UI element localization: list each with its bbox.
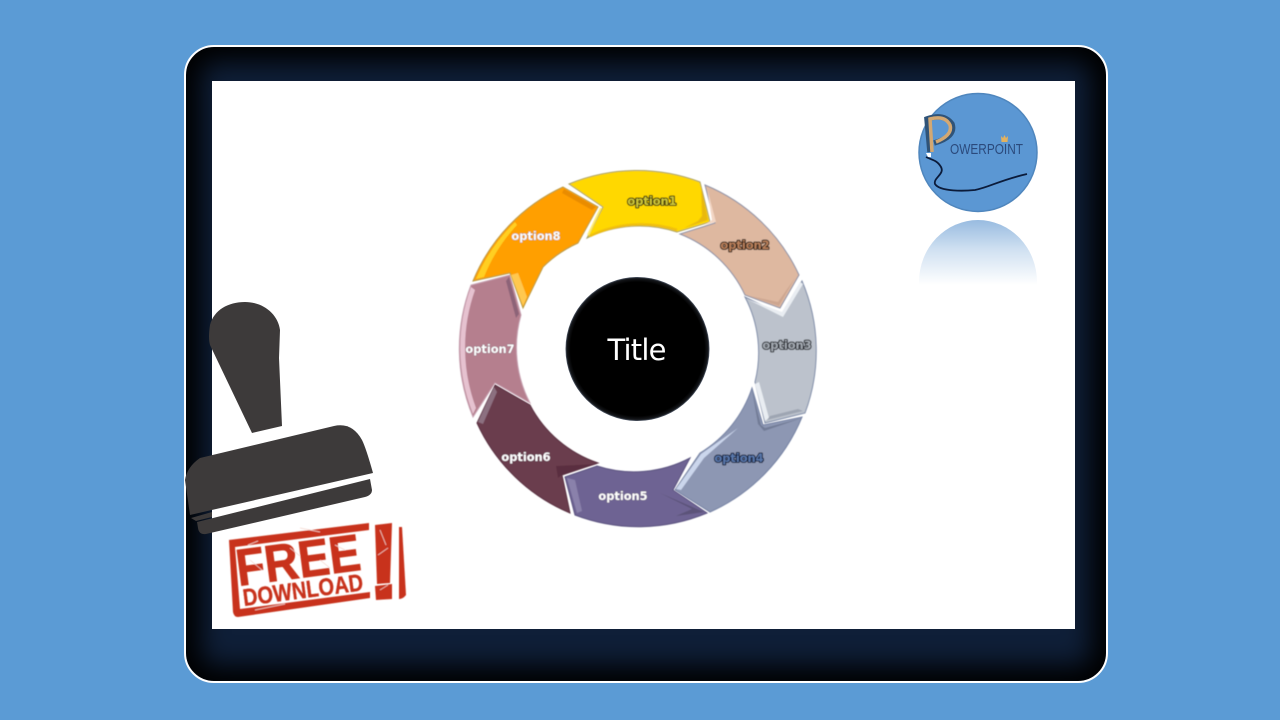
- cycle diagram: [459, 170, 816, 527]
- logo: [919, 94, 1037, 212]
- arrow: option7: [459, 275, 530, 417]
- stamp distress: [248, 528, 388, 610]
- exclamation mark: [375, 523, 406, 600]
- arrow: option2: [680, 185, 799, 308]
- arrow: option6: option6: [501, 450, 551, 464]
- stamp text: download: DOWNLOAD: [241, 569, 365, 612]
- arrow: option1: option1: [627, 194, 677, 208]
- arrow: option7: option7: [465, 342, 515, 356]
- device frame: [184, 45, 1108, 683]
- stamp icon: [185, 302, 373, 534]
- logo disc: [919, 94, 1037, 212]
- arrow: option1: [569, 170, 710, 238]
- arrow: option2: option2: [720, 238, 770, 252]
- arrow: option6: [477, 385, 598, 513]
- stamp frame: [229, 523, 370, 617]
- arrow: option5: [565, 458, 707, 527]
- arrow: option8: option8: [511, 229, 561, 243]
- arrow: option5: option5: [598, 489, 648, 503]
- arrow: option3: option3: [762, 338, 812, 352]
- logo letter P: [927, 117, 953, 152]
- arrow: option8: [473, 187, 598, 308]
- logo text: OWERPOINT: [950, 141, 1023, 158]
- arrow: option3: [745, 281, 816, 423]
- arrow: option4: [675, 388, 802, 512]
- white slide area: [212, 81, 1075, 629]
- logo crown: [1001, 135, 1008, 142]
- arrow: option4: option4: [714, 451, 764, 465]
- center circle: title: Title: [606, 333, 666, 367]
- logo reflection: [919, 220, 1037, 285]
- stamp text: free: FREE: [232, 524, 364, 598]
- logo pen line: [926, 157, 1027, 191]
- center circle: title: [566, 277, 710, 421]
- free download stamp: [229, 523, 406, 617]
